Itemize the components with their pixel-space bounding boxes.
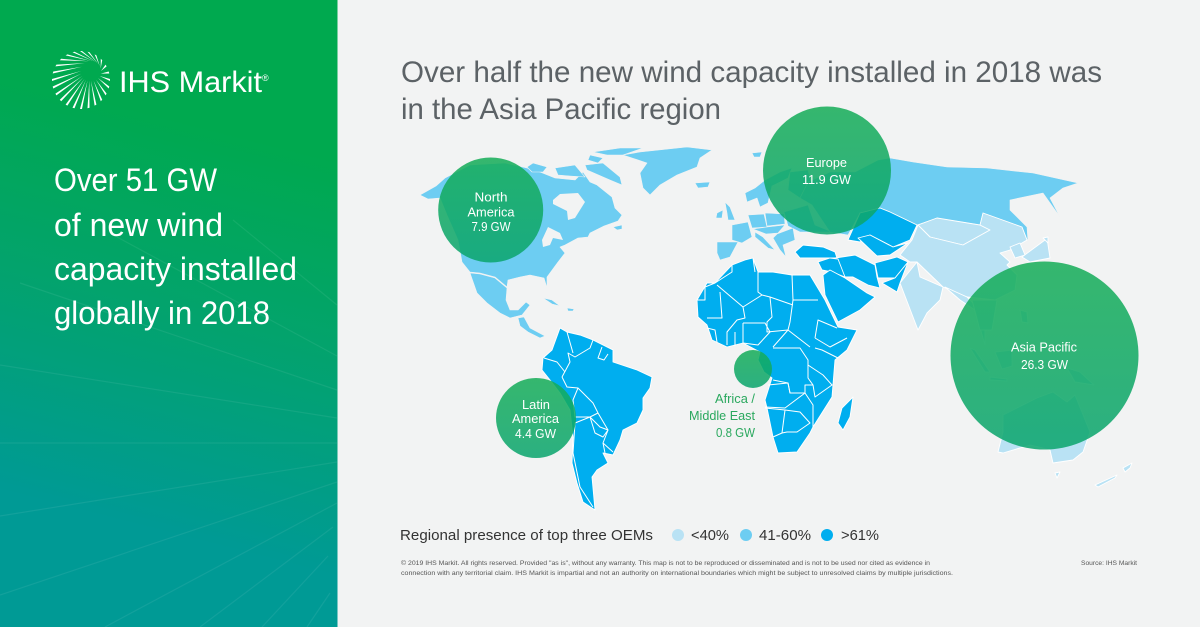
bubble: Latin America: America <box>512 411 560 426</box>
map: Europe <box>716 152 1078 260</box>
headline: left panel: globally in 2018 <box>54 295 270 331</box>
russia <box>800 158 1078 242</box>
madagascar <box>838 397 853 430</box>
map: Asia Pacific <box>900 213 1132 487</box>
hudson bay and great lakes <box>542 193 585 247</box>
source note: Source: IHS Markit <box>1081 561 1137 567</box>
bubble: Latin America: 4.4 GW <box>515 426 557 441</box>
world map <box>420 147 1132 510</box>
headline: left panel: of new wind <box>54 207 223 243</box>
logo wordmark: IHS Markit <box>119 66 263 99</box>
bubble: North America: North <box>474 190 508 204</box>
greenland <box>623 147 712 195</box>
bubble: Asia Pacific: Asia Pacific <box>1011 340 1077 354</box>
africa country borders <box>697 258 847 437</box>
bubble: Latin America <box>496 378 576 458</box>
legend item: over 61 percent: >61% <box>841 527 879 544</box>
bubble: Europe: Europe <box>806 155 847 170</box>
map: Middle East and Central Asia <box>795 208 917 322</box>
map: Africa <box>697 258 857 453</box>
legend: Regional presence of top three OEMs <box>400 527 653 544</box>
title <box>401 56 1102 126</box>
label: Africa / Middle East <box>689 391 756 440</box>
headline: left panel: Over 51 GW <box>54 162 218 198</box>
bubble: Latin America: Latin <box>522 397 550 412</box>
bubble: North America: 7.9 GW <box>472 219 511 234</box>
label: Africa / Middle East: 0.8 GW <box>716 425 756 440</box>
bubble: Asia Pacific: 26.3 GW <box>1021 357 1069 372</box>
panel: left green summary <box>0 0 338 627</box>
label: Africa / Middle East: Middle East <box>689 408 755 423</box>
bubble: Asia Pacific <box>950 262 1138 450</box>
logo: IHS Markit <box>52 51 269 109</box>
title: Over half the new wind capacity installed in 2018 was <box>401 56 1102 89</box>
footnote: copyright <box>401 560 953 577</box>
south america country borders <box>544 332 613 507</box>
legend item: under 40 percent: <40% <box>691 527 729 544</box>
legend item: 41 to 60 percent: 41-60% <box>759 527 811 544</box>
headline: left panel: capacity installed <box>54 251 297 287</box>
legend item: under 40 percent <box>672 527 729 544</box>
footnote: copyright: © 2019 IHS Markit. All rights reserved. Provided "as is", without any warranty. This map is not to be reproduced or disseminated and is not to be used nor cited as evidence in <box>401 560 930 567</box>
map: North America <box>420 147 712 338</box>
bubble: North America <box>438 158 543 262</box>
bubble: Europe: 11.9 GW <box>802 172 852 187</box>
legend item: over 61 percent <box>821 527 879 544</box>
bubble: Africa / Middle East <box>734 350 772 388</box>
label: Africa / Middle East: Africa / <box>715 391 755 406</box>
registered mark: ® <box>262 73 269 83</box>
icon: logo burst <box>52 51 110 109</box>
title: in the Asia Pacific region <box>401 93 721 126</box>
iceland <box>695 182 710 188</box>
bubble: Europe <box>763 106 891 234</box>
wind ray pattern <box>0 220 337 627</box>
footnote: copyright: connection with any territorial claim. IHS Markit is impartial and not an authority on international boundaries which might be subject to unresolved claims by multiple jurisdictions. <box>401 571 953 577</box>
legend <box>400 527 879 544</box>
bubble: North America: America <box>468 204 515 220</box>
headline: left panel <box>54 162 297 331</box>
south america <box>542 328 652 510</box>
